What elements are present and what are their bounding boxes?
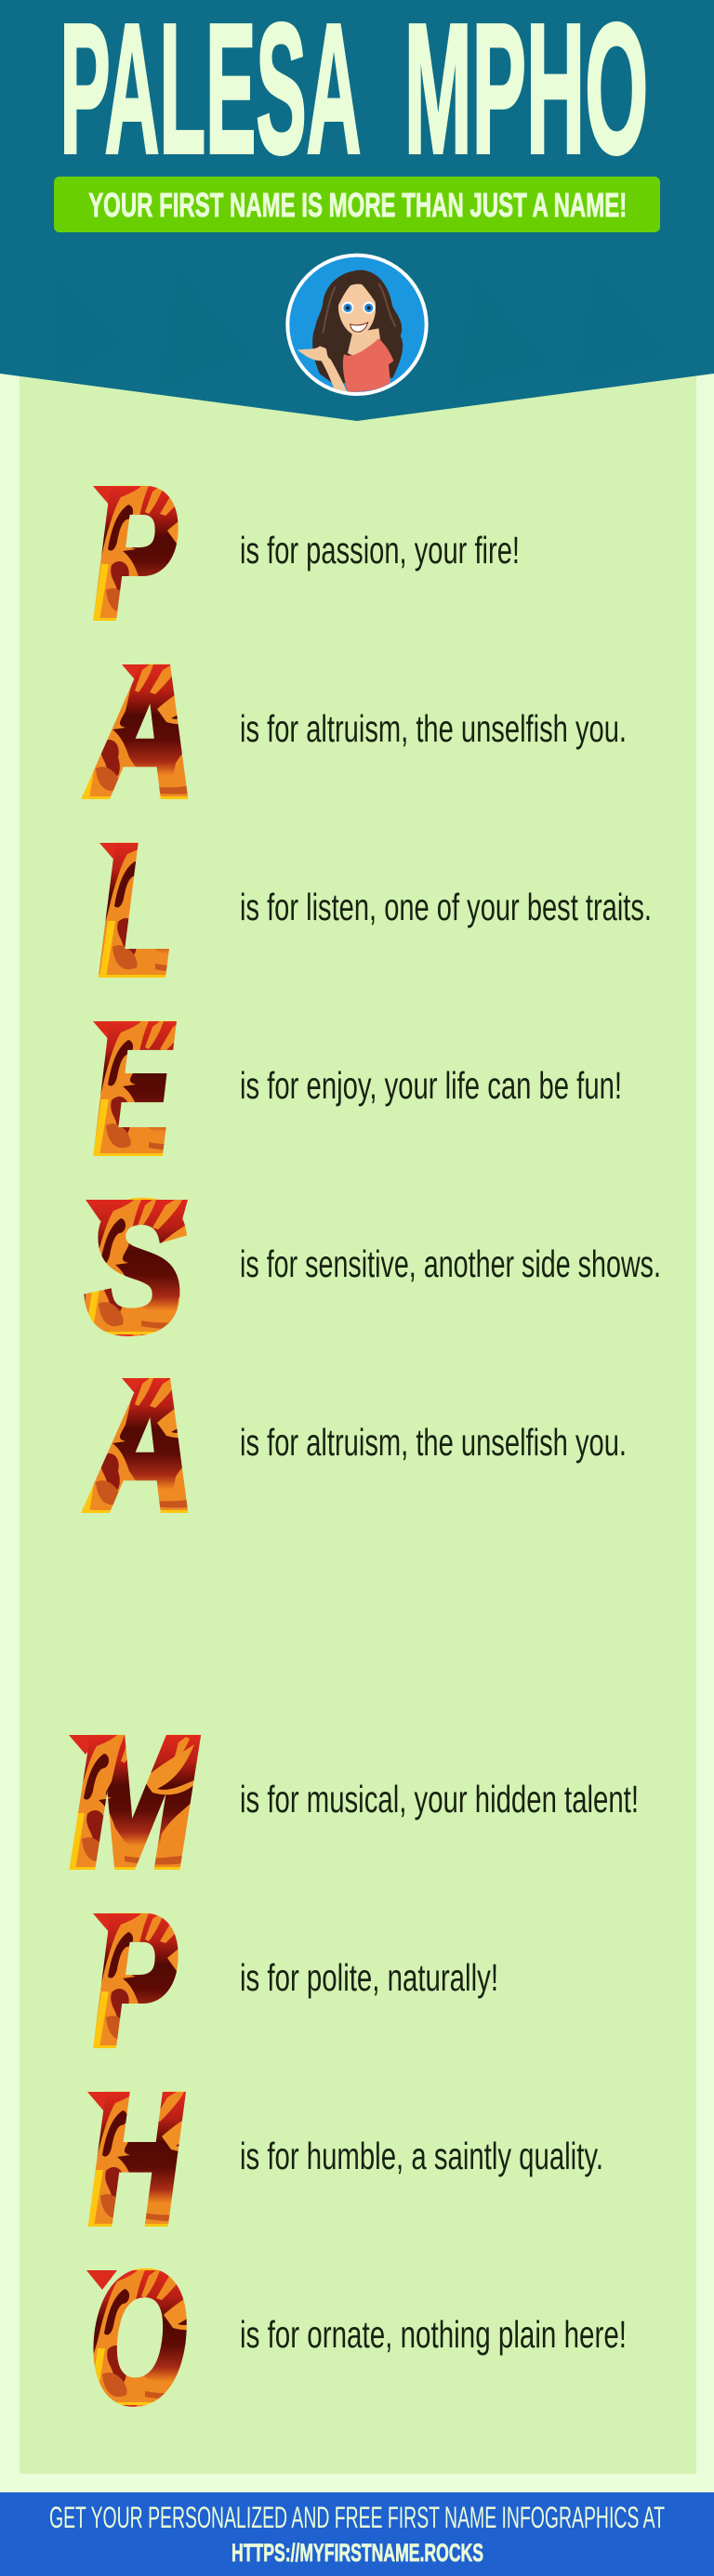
face xyxy=(338,284,376,335)
row 10: O xyxy=(86,2234,627,2440)
flame letter L xyxy=(99,807,173,1013)
footer xyxy=(0,2492,714,2576)
eyes xyxy=(342,302,353,313)
row 5: S xyxy=(86,1163,661,1370)
flame letter E xyxy=(93,985,174,1191)
flame letter E: E xyxy=(95,985,174,1191)
flame letter P: P xyxy=(95,450,176,656)
flame letter P xyxy=(93,450,176,656)
flame letter O xyxy=(86,2234,186,2440)
subtitle bar xyxy=(54,177,660,232)
flame letter P xyxy=(93,1877,176,2083)
flame letter L: L xyxy=(99,807,173,1013)
row 6: A xyxy=(86,1342,627,1548)
flame letter M: M xyxy=(71,1699,197,1905)
line 8 text: is for polite, naturally! xyxy=(240,1956,498,1999)
row 3: L xyxy=(99,807,652,1013)
flame letter A: A xyxy=(86,628,195,835)
row 7: M xyxy=(69,1699,639,1905)
avatar: cartoon woman in circle xyxy=(285,254,429,396)
row 2: A xyxy=(86,628,627,835)
row 9: H xyxy=(87,2056,603,2262)
mouth xyxy=(350,322,368,332)
flame letter H xyxy=(87,2056,183,2262)
flame letter H: H xyxy=(89,2056,183,2262)
line 1 text: is for passion, your fire! xyxy=(240,529,520,572)
flame letter O: O xyxy=(90,2234,186,2440)
row 1: P xyxy=(93,450,520,656)
hair xyxy=(312,270,403,384)
shirt xyxy=(343,338,393,392)
header banner xyxy=(0,0,714,421)
panel: letters background xyxy=(20,353,696,2474)
row 4: E xyxy=(93,985,622,1191)
row 8: P xyxy=(93,1877,498,2083)
flame letter A: A xyxy=(86,1342,195,1548)
neck and arm xyxy=(348,328,380,358)
flame letter S: S xyxy=(86,1163,184,1370)
flame letter P: P xyxy=(95,1877,176,2083)
